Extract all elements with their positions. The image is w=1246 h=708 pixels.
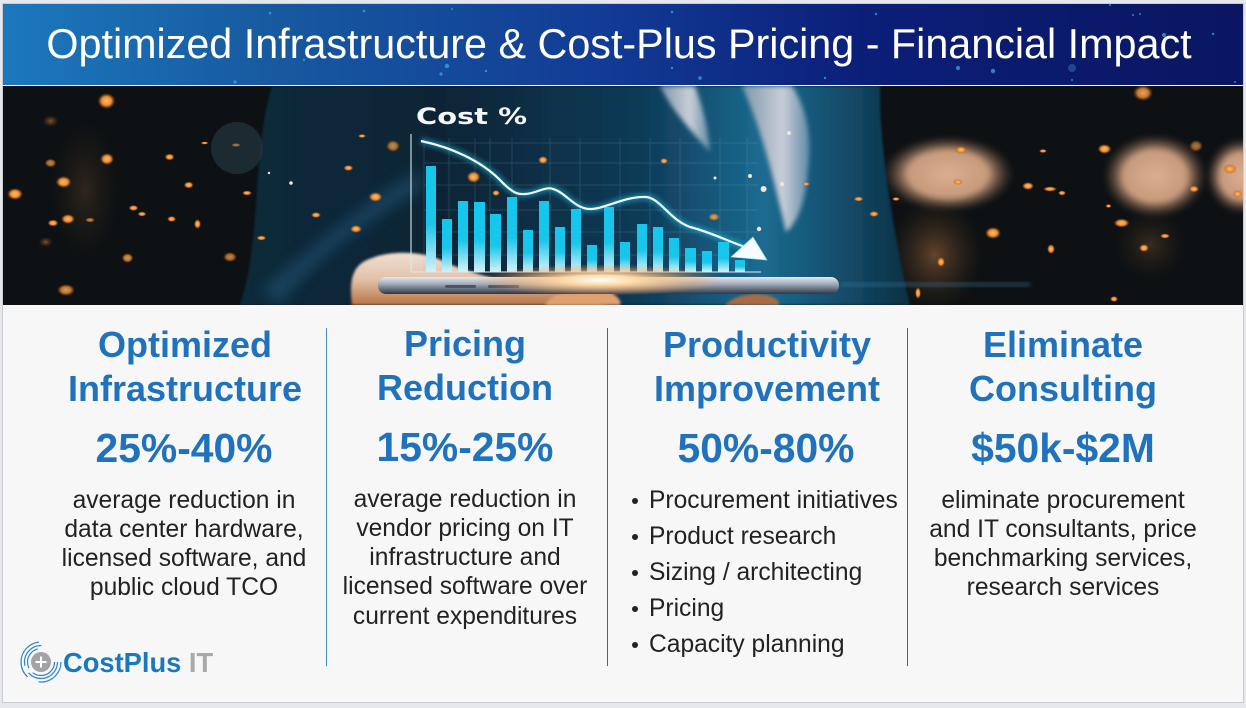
divider 2 bbox=[607, 328, 608, 666]
range: 15%-25% bbox=[377, 424, 553, 470]
panel: eliminate consulting bbox=[929, 324, 1197, 601]
heading: Infrastructure bbox=[68, 368, 302, 409]
description: current expenditures bbox=[353, 603, 577, 630]
chart label: Cost % bbox=[416, 104, 527, 130]
range: 50%-80% bbox=[678, 425, 854, 471]
range: $50k-$2M bbox=[971, 425, 1155, 471]
chart grid bbox=[424, 138, 758, 272]
title: Optimized Infrastructure & Cost-Plus Pricing - Financial Impact bbox=[46, 21, 1192, 67]
description: average reduction in bbox=[354, 486, 576, 512]
bullet list: Product research bbox=[649, 523, 836, 550]
chart axes bbox=[411, 134, 761, 272]
hand bbox=[351, 253, 779, 305]
description: licensed software over bbox=[343, 573, 587, 600]
description: licensed software, and bbox=[62, 545, 306, 572]
heading: Improvement bbox=[654, 368, 880, 409]
heading: Optimized bbox=[98, 324, 272, 365]
heading: Eliminate bbox=[983, 324, 1143, 365]
phone bbox=[378, 264, 1030, 296]
hero photo: hand holding phone with falling cost chart bbox=[3, 86, 1243, 305]
bullet list: Procurement initiatives bbox=[649, 487, 898, 514]
description: research services bbox=[967, 574, 1159, 601]
description: infrastructure and bbox=[369, 544, 561, 571]
heading bbox=[68, 324, 302, 409]
heading: Consulting bbox=[969, 368, 1157, 409]
heading bbox=[654, 324, 880, 409]
logo: CostPlus IT bbox=[20, 642, 213, 683]
heading bbox=[377, 323, 553, 408]
description bbox=[343, 486, 587, 630]
description: eliminate procurement bbox=[941, 486, 1185, 514]
bullet list: Pricing bbox=[649, 595, 724, 622]
description: and IT consultants, price bbox=[929, 516, 1197, 543]
divider 1 bbox=[326, 328, 327, 666]
white rule under banner bbox=[3, 85, 1243, 86]
description bbox=[929, 486, 1197, 601]
chart bars bbox=[426, 166, 745, 272]
description: benchmarking services, bbox=[934, 545, 1192, 572]
logo wordmark: CostPlus IT bbox=[63, 647, 213, 678]
panel: optimized infrastructure bbox=[62, 324, 306, 601]
sparks bbox=[7, 85, 1243, 302]
suit bbox=[211, 86, 910, 305]
description: public cloud TCO bbox=[90, 574, 278, 601]
description: average reduction in bbox=[73, 486, 295, 514]
bullet list: Sizing / architecting bbox=[649, 559, 862, 586]
description bbox=[62, 486, 306, 601]
description: vendor pricing on IT bbox=[356, 515, 574, 542]
heading: Pricing bbox=[404, 323, 526, 364]
heading bbox=[969, 324, 1157, 409]
panel: productivity improvement bbox=[632, 324, 898, 658]
logo icon bbox=[20, 642, 62, 683]
bokeh lights bbox=[50, 120, 1246, 311]
trend line with arrow bbox=[421, 141, 767, 260]
heading: Reduction bbox=[377, 367, 553, 408]
description: data center hardware, bbox=[64, 516, 304, 543]
panel: pricing reduction bbox=[343, 323, 587, 630]
heading: Productivity bbox=[663, 324, 871, 365]
bullet list bbox=[632, 487, 898, 658]
bullet list: Capacity planning bbox=[649, 631, 845, 658]
range: 25%-40% bbox=[96, 425, 272, 471]
header banner background bbox=[3, 4, 1243, 85]
divider 3 bbox=[907, 328, 908, 666]
